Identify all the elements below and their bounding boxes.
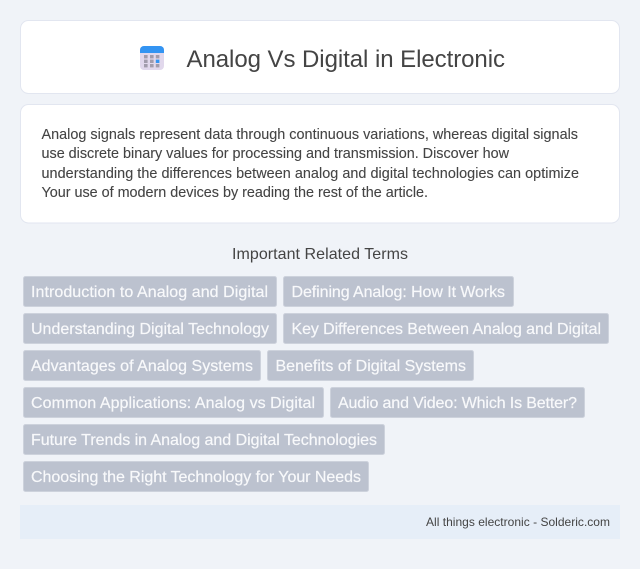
tag: advantages of analog bbox=[24, 350, 260, 380]
panel: introduction paragraph: Analog signals represent data through continuous variations, whereas digital signals bbox=[42, 127, 578, 143]
tag: defining analog: Defining Analog: How It Works bbox=[292, 284, 505, 301]
icon: calendar grid bbox=[140, 46, 164, 70]
tag: audio and video bbox=[330, 388, 584, 418]
tag: key differences: Key Differences Between Analog and Digital bbox=[292, 321, 601, 338]
tag: future trends bbox=[24, 424, 384, 454]
tag list bbox=[24, 276, 608, 492]
footer bbox=[20, 505, 620, 539]
header panel bbox=[20, 20, 620, 94]
tag: common applications: Common Applications: Analog vs Digital bbox=[31, 395, 315, 412]
panel: introduction paragraph: use discrete binary values for processing and transmission. Discover how bbox=[42, 146, 510, 162]
panel: introduction paragraph: Your use of modern devices by reading the rest of the article. bbox=[42, 185, 428, 201]
panel: introduction paragraph: understanding the differences between analog and digital technologies can optimize bbox=[42, 166, 579, 182]
tag: benefits of digital: Benefits of Digital Systems bbox=[276, 358, 466, 375]
tag: understanding digital: Understanding Digital Technology bbox=[31, 321, 269, 338]
panel: introduction paragraph bbox=[20, 104, 620, 223]
tag: defining analog bbox=[284, 276, 514, 306]
tag: introduction bbox=[24, 276, 276, 306]
tag: key differences bbox=[284, 314, 608, 344]
tag: common applications bbox=[24, 388, 324, 418]
tag: future trends: Future Trends in Analog and Digital Technologies bbox=[31, 432, 377, 449]
tag: understanding digital bbox=[24, 314, 276, 344]
tag: choosing technology bbox=[24, 462, 368, 492]
footer: All things electronic - Solderic.com bbox=[426, 515, 610, 529]
title: Analog Vs Digital in Electronic bbox=[186, 46, 505, 73]
tag: audio and video: Audio and Video: Which Is Better? bbox=[338, 395, 577, 412]
tag: choosing technology: Choosing the Right Technology for Your Needs bbox=[31, 469, 361, 486]
tag: advantages of analog: Advantages of Analog Systems bbox=[31, 358, 253, 375]
heading: important related terms: Important Related Terms bbox=[232, 246, 408, 263]
tag: introduction: Introduction to Analog and Digital bbox=[31, 284, 268, 301]
tag: benefits of digital bbox=[268, 350, 474, 380]
